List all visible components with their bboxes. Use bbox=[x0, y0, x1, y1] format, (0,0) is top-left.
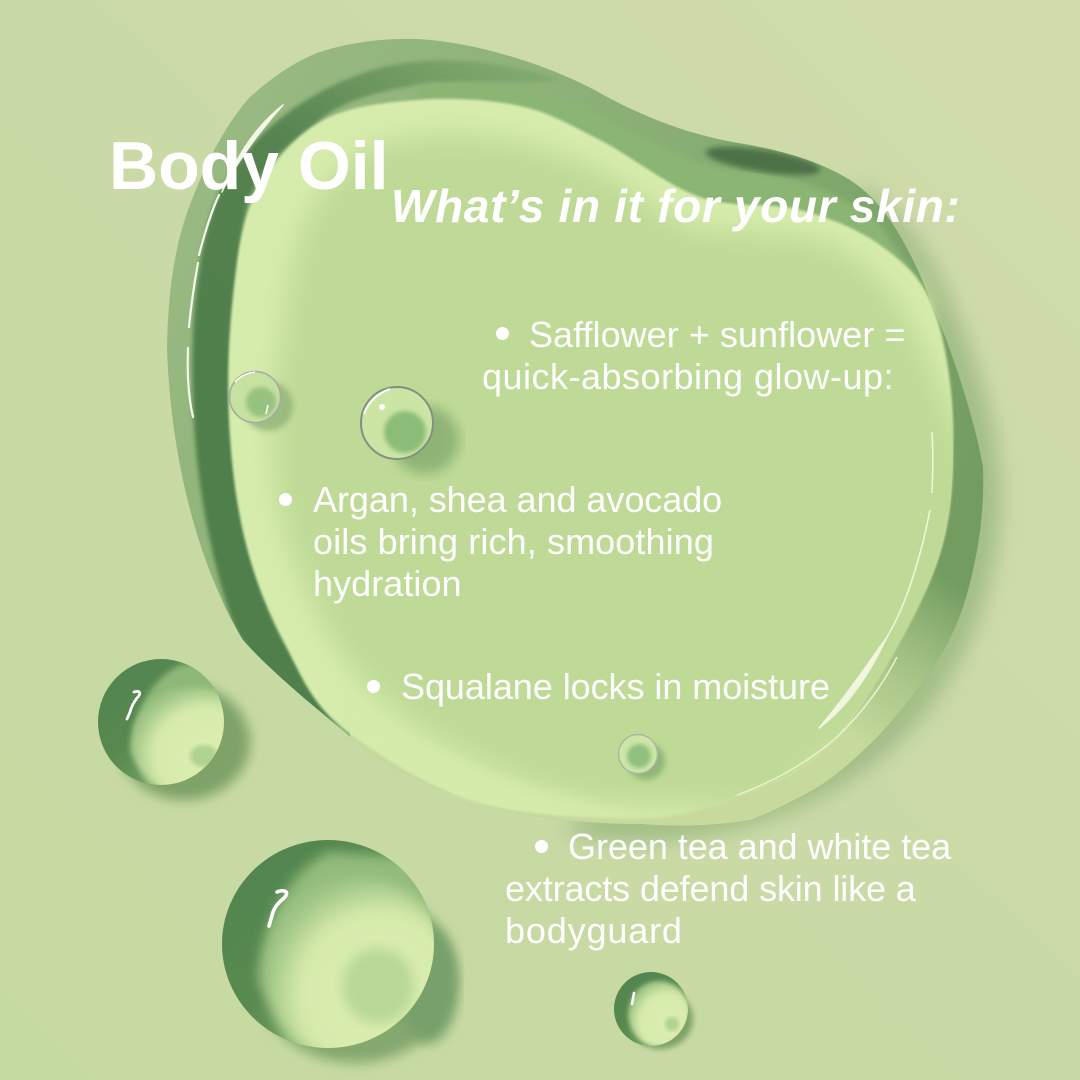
droplet: large bottom bbox=[222, 840, 458, 1066]
subtitle: What’s in it for your skin: bbox=[391, 180, 961, 232]
specular highlights bbox=[222, 105, 283, 192]
large oil blob bbox=[167, 39, 1000, 840]
bullet: green tea and white tea: bodyguard bbox=[505, 910, 683, 951]
bullet: safflower and sunflower bbox=[482, 314, 905, 397]
small droplet on blob: left bbox=[229, 371, 293, 431]
bullet: safflower and sunflower: Safflower + sunflower = bbox=[529, 314, 905, 355]
light pool surface bbox=[228, 99, 953, 818]
inner base colour bbox=[273, 134, 975, 810]
dark pinch bbox=[704, 144, 822, 178]
top mid-green band bbox=[420, 88, 908, 267]
bullet: argan, shea and avocado bbox=[279, 479, 722, 604]
bullet: green tea and white tea bbox=[505, 826, 952, 951]
lower-right pale fade of the rim bbox=[350, 584, 963, 826]
bullet: safflower and sunflower: quick-absorbing glow-up: bbox=[482, 356, 894, 397]
droplet: medium left bbox=[98, 659, 252, 800]
bullet: green tea and white tea: Green tea and white tea bbox=[568, 826, 951, 867]
bullet: argan, shea and avocado: hydration bbox=[313, 563, 462, 604]
bullet: squalane: Squalane locks in moisture bbox=[401, 666, 830, 707]
blob cast shadow bbox=[560, 180, 1001, 842]
bullet: argan, shea and avocado: oils bring rich, smoothing bbox=[313, 521, 714, 562]
droplet: small bottom right bbox=[614, 972, 693, 1049]
small droplet on blob: bottom bbox=[618, 734, 665, 780]
bullet: green tea and white tea: extracts defend skin like a bbox=[505, 868, 916, 909]
small droplet on blob: centre bbox=[360, 386, 459, 474]
dark inner crescent bbox=[192, 61, 560, 728]
title: Body Oil bbox=[109, 128, 389, 204]
bullet: argan, shea and avocado: Argan, shea and avocado bbox=[313, 479, 722, 520]
bottom pale edge bbox=[346, 730, 350, 733]
